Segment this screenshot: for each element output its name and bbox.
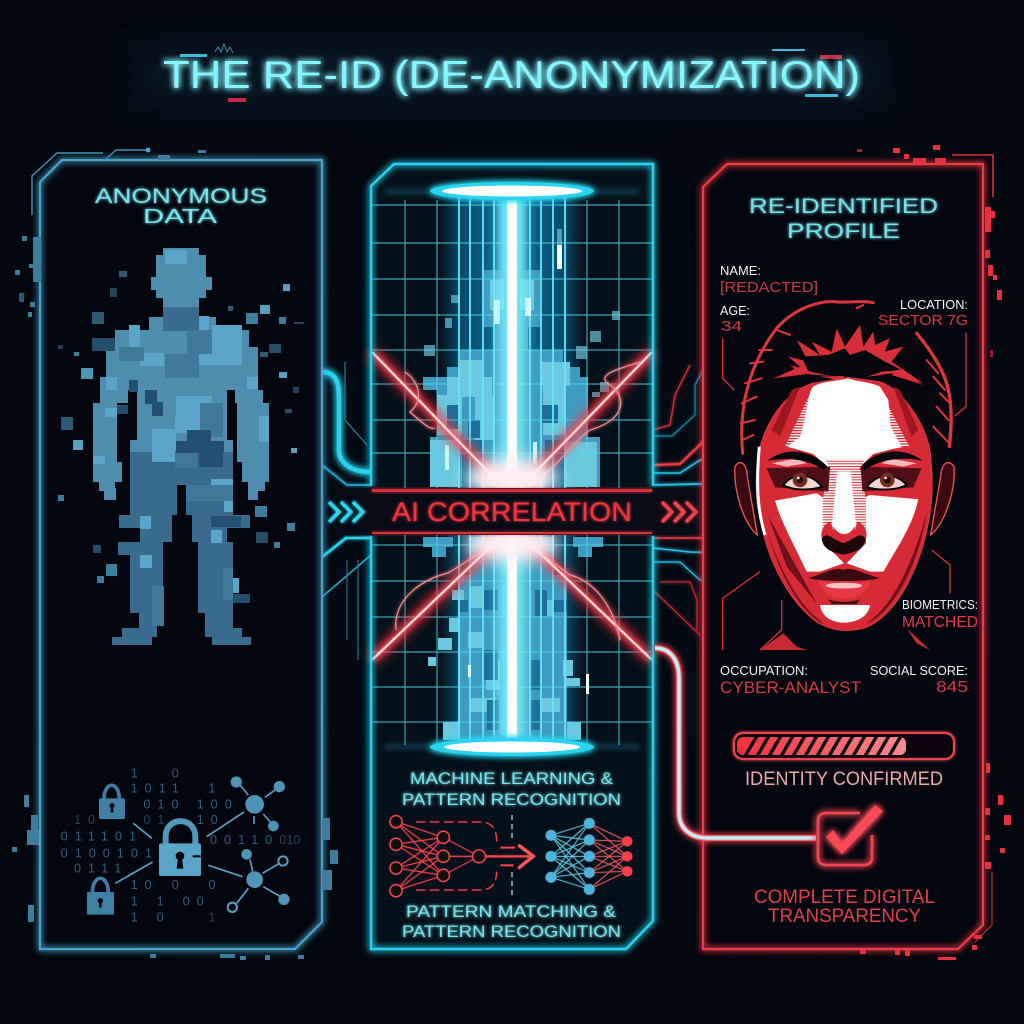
field: age [720, 304, 750, 335]
binary digits: 10 [74, 813, 102, 827]
title [130, 40, 890, 110]
hair [739, 302, 952, 467]
identity confirmed label: IDENTITY CONFIRMED [745, 769, 943, 790]
hair fringe strands [773, 365, 923, 385]
field: location [878, 298, 968, 329]
binary digits: 0 [172, 766, 186, 780]
heading: re-identified profile [749, 195, 938, 243]
panel border [371, 164, 653, 949]
binary digits: 00 [183, 895, 211, 909]
complete digital transparency label: TRANSPARENCY [768, 906, 921, 927]
heading: re-identified profile: RE-IDENTIFIED [749, 195, 938, 218]
binary digits: 10 [197, 813, 225, 827]
heading: anonymous data [95, 185, 267, 228]
face base [756, 377, 932, 631]
hair dark mound [802, 348, 902, 382]
burst glow lower [466, 526, 558, 562]
divider: dashed vertical [511, 815, 513, 897]
field: social score [870, 663, 968, 696]
temple shadow [772, 387, 918, 437]
icon: network nodes [115, 776, 290, 912]
diagram: red input network [390, 816, 533, 897]
left brow highlight [772, 458, 807, 467]
field: occupation: CYBER-ANALYST [720, 678, 861, 697]
binary digits: 1 [131, 766, 145, 780]
jaw shadow [763, 513, 927, 625]
pixel figure, lower [423, 537, 603, 740]
binary digits: 10 [131, 878, 159, 892]
pattern matching caption [402, 902, 621, 941]
scattered data fragments [12, 150, 338, 960]
binary digits: 1 [131, 895, 145, 909]
between brow scanlines [826, 461, 864, 474]
portrait hud brackets [723, 333, 966, 650]
panel: anonymous data [12, 148, 338, 960]
field: biometrics: MATCHED [902, 614, 978, 631]
nose shadow [822, 535, 866, 555]
bottom emitter disc [385, 738, 639, 756]
title: THE RE-ID (DE-ANONYMIZATION) [163, 54, 860, 97]
binary digits: 1 [208, 781, 222, 795]
right eye [867, 473, 907, 490]
icon: large padlock [159, 821, 201, 876]
right eyebrow [861, 451, 923, 471]
icon: small padlock bottom [87, 878, 114, 915]
binary digits: 010 [279, 833, 300, 847]
binary digits: 100 [197, 797, 239, 811]
icon: checkbox [818, 805, 883, 865]
binary digits: 1 [157, 895, 171, 909]
right eye socket [861, 467, 922, 492]
pixel silhouette figure [92, 248, 269, 645]
icon: small padlock top [99, 785, 125, 819]
field: social score: SOCIAL SCORE: [870, 663, 968, 678]
binary digits [61, 766, 300, 925]
binary digits: 010 [143, 797, 185, 811]
scattered red fragments [857, 145, 1011, 960]
progress bar [734, 733, 954, 759]
lip highlight [826, 583, 862, 589]
connector: left panel to centre [322, 362, 690, 675]
chin highlight [820, 605, 870, 623]
right ear [931, 463, 954, 535]
hair outline strands [741, 302, 951, 453]
panel border [40, 160, 322, 949]
binary digits: 01 [143, 813, 171, 827]
machine learning caption: MACHINE LEARNING & [410, 769, 614, 788]
field: biometrics: BIOMETRICS: [902, 597, 978, 612]
field: biometrics [902, 597, 978, 631]
field: occupation: OCCUPATION: [720, 663, 808, 678]
binary digits: 0 [157, 911, 171, 925]
panel border [703, 164, 983, 949]
small data rectangles [445, 229, 589, 694]
left eyebrow [768, 452, 827, 470]
field: age: 34 [721, 318, 742, 335]
right cheek highlight [847, 495, 918, 572]
banner: ai correlation: AI CORRELATION [392, 497, 632, 527]
field: social score: 845 [936, 679, 968, 696]
machine learning caption [402, 769, 621, 809]
left cheek highlight [775, 493, 844, 572]
pixel figure, upper [423, 270, 620, 487]
field: name: [REDACTED] [720, 279, 818, 296]
binary digits: 011101 [61, 830, 143, 844]
complete digital transparency label [754, 887, 935, 927]
field: name [720, 264, 818, 296]
field: occupation [720, 663, 861, 697]
central energy column [498, 192, 526, 748]
binary digits: 0100101 [61, 846, 159, 860]
red correlation rays [372, 352, 652, 660]
top emitter disc [385, 182, 639, 200]
connector: to checkbox [655, 648, 816, 838]
lower lip [818, 582, 870, 598]
binary digits: 0 [172, 878, 186, 892]
connector: centre to right panel [653, 365, 740, 635]
chin shadow [828, 599, 860, 604]
binary digits: 0111 [74, 862, 128, 876]
binary digits: 1011 [131, 781, 186, 795]
field: name: NAME: [720, 264, 761, 278]
forehead highlight [787, 378, 902, 467]
complete digital transparency label: COMPLETE DIGITAL [754, 887, 935, 908]
nostril wings [821, 522, 867, 543]
grid lines [372, 200, 652, 745]
left eye socket [767, 467, 830, 492]
hair highlight [773, 325, 923, 383]
nose sides [823, 470, 866, 537]
nose highlight [832, 472, 856, 534]
light beam glow [440, 195, 584, 747]
heading: anonymous data: ANONYMOUS [95, 185, 267, 208]
panel: re-identified profile [655, 145, 1011, 960]
binary digits: 1 [208, 911, 222, 925]
pattern matching caption: PATTERN RECOGNITION [402, 922, 621, 941]
heading: anonymous data: DATA [143, 206, 218, 228]
pattern matching caption: PATTERN MATCHING & [406, 902, 617, 921]
outer circuit trace [952, 155, 993, 197]
heading: re-identified profile: PROFILE [787, 220, 900, 243]
banner: ai correlation [322, 488, 703, 535]
left eye [783, 473, 822, 489]
binary digits: 0 [210, 833, 224, 847]
binary digits: 0 [208, 878, 222, 892]
binary digits: 0110 [224, 833, 279, 847]
forehead scanlines [785, 383, 909, 450]
icon: cyan chevrons [329, 502, 363, 522]
circuit node [146, 148, 150, 152]
field: age: AGE: [720, 304, 750, 318]
field: location: LOCATION: [900, 298, 968, 312]
portrait: red face [735, 302, 954, 650]
upper lip [808, 569, 880, 581]
field: location: SECTOR 7G [878, 312, 968, 329]
machine learning caption: PATTERN RECOGNITION [402, 790, 621, 809]
binary digits: 1 [131, 911, 145, 925]
icon: red chevrons [662, 502, 696, 522]
ears [735, 463, 757, 535]
outer circuit trace [32, 150, 146, 215]
neck strands [760, 628, 930, 650]
panel: ai correlation [371, 164, 653, 949]
central burst glow [466, 458, 558, 498]
right brow highlight [882, 458, 917, 467]
diagram: output network [546, 818, 632, 895]
face rim light [758, 447, 765, 535]
